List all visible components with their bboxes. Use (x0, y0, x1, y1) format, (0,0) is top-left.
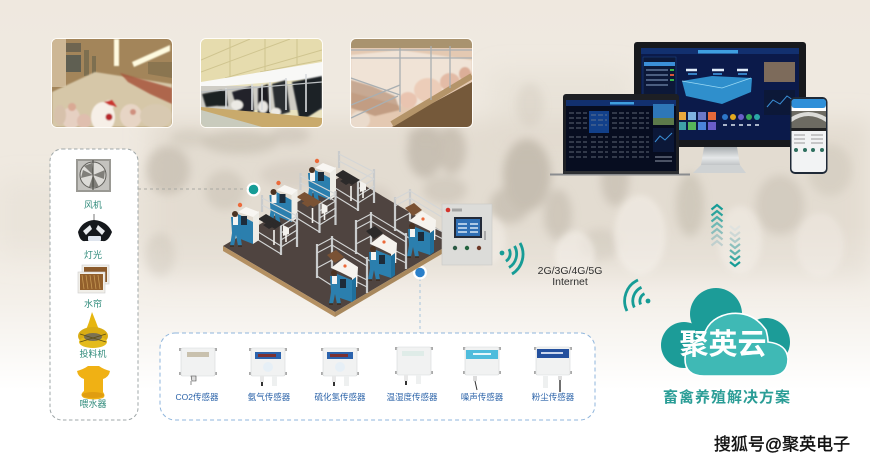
icon: lamp (78, 214, 112, 241)
photo: dairy cow barn (200, 38, 323, 128)
sensor: hydrogen sulfide: 硫化氢传感器 (314, 392, 366, 402)
sensor: hydrogen sulfide (314, 348, 366, 402)
panel: farm equipment (50, 149, 138, 420)
text: network label: 2G/3G/4G/5G (538, 265, 602, 277)
isometric farm scene (223, 151, 457, 317)
text: watermark: 搜狐号@聚英电子 (714, 435, 850, 454)
sensor: ammonia (248, 348, 291, 402)
desktop monitor dashboard (634, 42, 806, 173)
label: water dispenser: 喂水器 (79, 398, 107, 409)
sensor: noise: 噪声传感器 (461, 392, 504, 402)
sensor: ammonia: 氨气传感器 (248, 392, 291, 402)
arrows: download chevrons (730, 226, 740, 266)
icon: fan (76, 159, 111, 192)
label: water curtain: 水帘 (84, 298, 102, 309)
icon: feeder (78, 312, 108, 348)
icon: wifi signal to cloud (625, 280, 650, 311)
arrows: upload chevrons (712, 205, 722, 246)
icon: water dispenser (77, 366, 110, 400)
sensor: dust (532, 347, 575, 402)
sensor: temperature humidity (386, 347, 438, 402)
control cabinet (442, 204, 492, 265)
text: network label: Internet (552, 276, 588, 288)
sensor: dust: 粉尘传感器 (532, 392, 575, 402)
logo: 聚英云 cloud: 聚英云 (679, 321, 767, 363)
photo: chicken house (51, 38, 173, 132)
connector: farm to sensors (413, 266, 427, 334)
photo: pig pens (350, 38, 473, 129)
connector: equipment to farm (138, 182, 260, 196)
text: network label (538, 265, 602, 288)
laptop dashboard (550, 94, 690, 174)
text: solution subtitle: 畜禽养殖解决方案 (663, 388, 791, 406)
sensor: noise (461, 347, 504, 402)
icon: water curtain (78, 265, 109, 293)
sensor: CO2 (176, 348, 219, 402)
logo: 聚英云 cloud (661, 288, 790, 376)
icon: wifi signal from cabinet (500, 243, 523, 274)
sensor: CO2: CO2传感器 (176, 392, 219, 402)
label: feeder: 投料机 (79, 348, 107, 359)
phone app (790, 97, 828, 174)
sensor: temperature humidity: 温湿度传感器 (386, 392, 438, 402)
panel: sensors (160, 333, 595, 420)
label: lamp: 灯光 (84, 249, 102, 260)
label: fan: 风机 (84, 199, 102, 210)
